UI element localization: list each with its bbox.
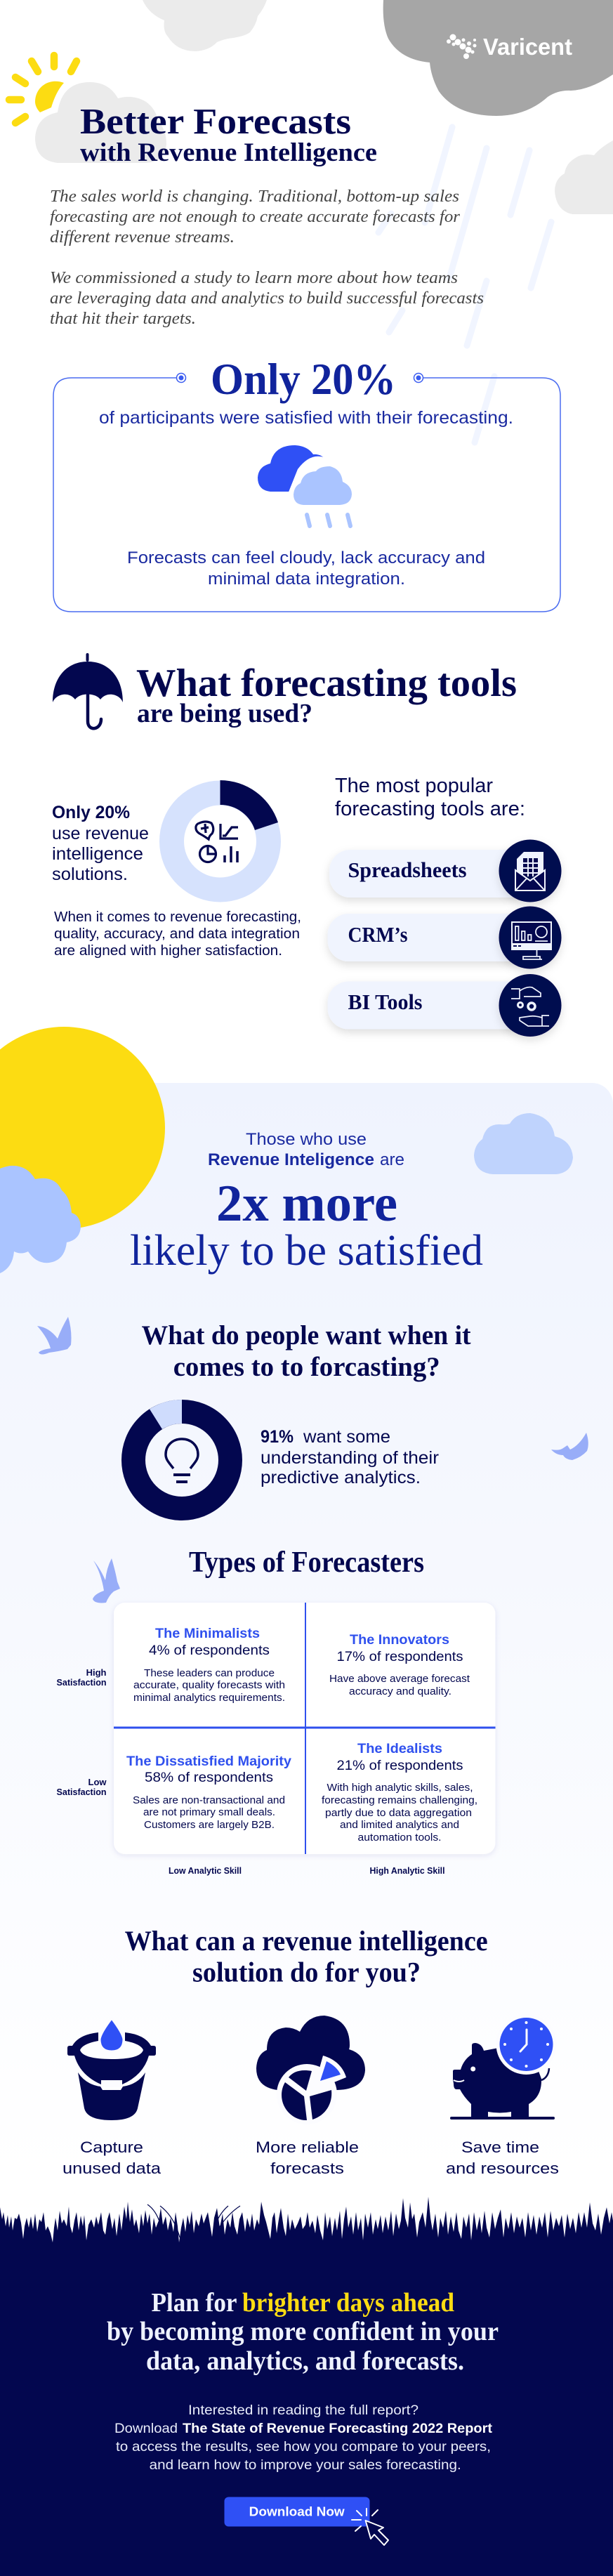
intro text: The sales world is changing. Traditional, bottom-up sales <box>50 188 459 206</box>
axis labels: Satisfaction <box>56 1677 107 1688</box>
quadrant: idealists: 21% of respondents <box>337 1759 463 1773</box>
heading: what can RI do <box>125 1925 488 1987</box>
icon: sun with rays <box>9 55 77 123</box>
text: those who use: Revenue Inteligence <box>208 1150 374 1169</box>
icon: umbrella <box>53 653 123 728</box>
footer: navy panel with grass edge <box>0 2197 613 2576</box>
icon: hands and gears <box>511 987 549 1026</box>
icon: bird right <box>551 1433 588 1460</box>
heading: what forecasting tools: are being used? <box>137 699 312 728</box>
icon: monitor <box>511 921 552 959</box>
panel: only 20 percent: Only 20% <box>211 355 396 404</box>
benefit labels: unused data <box>62 2160 162 2177</box>
text: full report invitation: Interested in reading the full report? <box>188 2403 418 2418</box>
stat: 2x more: 2x more <box>216 1175 397 1233</box>
intro text: different revenue streams. <box>50 228 235 247</box>
benefit labels: Save time <box>461 2138 539 2156</box>
quadrant: dissatisfied majority: Sales are non-transactional and <box>133 1794 285 1806</box>
text: only 20 percent use RI: solutions. <box>52 865 128 884</box>
quadrant: dissatisfied majority: The Dissatisfied Majority <box>126 1754 291 1769</box>
pill: BI tools <box>327 974 562 1037</box>
heading: what can RI do: What can a revenue intelligence <box>125 1925 488 1957</box>
icon: spreadsheet envelope <box>515 852 545 891</box>
icon: bird left <box>37 1317 72 1354</box>
panel: only 20 percent <box>53 355 560 612</box>
benefit labels: More reliable <box>256 2138 359 2156</box>
quadrant: minimalists: minimal analytics requirements. <box>133 1692 285 1704</box>
quadrant: minimalists: accurate, quality forecasts with <box>133 1679 285 1691</box>
axis labels: Satisfaction <box>56 1787 107 1797</box>
background cloud: top centre <box>143 0 267 51</box>
stat: 2x more <box>130 1175 483 1275</box>
heading: types of forecasters: Types of Forecasters <box>189 1546 424 1579</box>
panel: only 20 percent: minimal data integration. <box>208 570 405 589</box>
pill: spreadsheets: Spreadsheets <box>348 857 466 882</box>
button: download now <box>225 2497 369 2527</box>
icon: cloud right <box>474 1113 573 1174</box>
quadrant: minimalists <box>133 1627 285 1704</box>
quadrant: idealists: The Idealists <box>357 1742 442 1756</box>
text: those who use: are <box>380 1150 404 1169</box>
pill: CRMs: CRM’s <box>348 922 407 947</box>
heading: plan for brighter days: data, analytics, and forecasts. <box>146 2346 464 2376</box>
quadrant: innovators: accuracy and quality. <box>349 1685 451 1697</box>
quadrant: idealists: With high analytic skills, sales, <box>327 1782 473 1794</box>
heading: plan for brighter days: Plan for <box>152 2288 237 2318</box>
text: full report invitation <box>114 2403 493 2473</box>
icon: click cursor <box>352 2509 388 2545</box>
text: those who use: Those who use <box>246 1130 367 1149</box>
benefit labels <box>62 2138 559 2177</box>
intro text <box>50 188 484 328</box>
axis labels <box>56 1667 445 1876</box>
text: only 20 percent use RI: intelligence <box>52 844 143 864</box>
button: download now: Download Now <box>249 2504 345 2518</box>
title: Better Forecasts <box>80 102 351 142</box>
quadrant: idealists: partly due to data aggregation <box>325 1807 472 1819</box>
panel: satisfaction background <box>0 1083 613 2235</box>
icon: piggy bank with clock <box>450 2014 556 2120</box>
text: full report invitation: to access the results, see how you compare to your peers, <box>116 2440 491 2455</box>
heading: what can RI do: solution do for you? <box>192 1957 421 1987</box>
axis labels: Low <box>88 1777 107 1787</box>
axis labels: High Analytic Skill <box>369 1865 445 1876</box>
heading: plan for brighter days: by becoming more confident in your <box>107 2317 499 2346</box>
heading: what do people want: What do people want when it <box>142 1320 471 1351</box>
background cloud: logo cloud <box>383 0 613 116</box>
text: only 20 percent use RI: use revenue <box>52 824 149 843</box>
icon: bucket <box>67 2018 156 2120</box>
icon: analytics glyphs <box>196 822 238 862</box>
text: full report invitation: and learn how to improve your sales forecasting. <box>150 2458 461 2473</box>
text: full report invitation: Download <box>114 2421 178 2436</box>
benefit labels: forecasts <box>270 2160 344 2177</box>
stat: 2x more: likely to be satisfied <box>130 1227 483 1275</box>
icon: cloud with pie chart <box>256 2016 365 2124</box>
text: 91 percent: understanding of their <box>261 1448 439 1468</box>
icon: cloud over sun <box>0 1166 81 1273</box>
chart: forecaster matrix <box>114 1603 496 1854</box>
panel: only 20 percent: Forecasts can feel cloudy, lack accuracy and <box>127 548 485 567</box>
quadrant: minimalists: These leaders can produce <box>144 1667 275 1679</box>
benefit labels: Capture <box>80 2138 143 2156</box>
title: with Revenue Intelligence <box>80 138 377 167</box>
logo: Varicent: Varicent <box>483 34 572 60</box>
background cloud: behind title <box>35 82 166 163</box>
chart: 91 percent donut <box>133 1400 230 1509</box>
icon: light bulb <box>166 1439 198 1482</box>
rain streaks <box>378 127 551 442</box>
text: 91 percent <box>261 1427 439 1487</box>
quadrant: idealists: automation tools. <box>358 1832 441 1844</box>
text: satisfaction note <box>54 909 301 959</box>
benefit labels: and resources <box>446 2160 559 2177</box>
text: full report invitation: The State of Revenue Forecasting 2022 Report <box>183 2421 493 2436</box>
axis labels: Low Analytic Skill <box>169 1865 242 1876</box>
intro text: forecasting are not enough to create accurate forecasts for <box>50 208 461 226</box>
heading: most popular tools: forecasting tools are: <box>335 798 525 820</box>
quadrant: dissatisfied majority <box>126 1754 291 1831</box>
intro text: that hit their targets. <box>50 310 196 328</box>
heading: what forecasting tools <box>136 662 517 728</box>
text: satisfaction note: quality, accuracy, and data integration <box>54 926 300 942</box>
quadrant: idealists: and limited analytics and <box>340 1819 459 1831</box>
title <box>80 102 377 167</box>
heading: what do people want: comes to to forcasting? <box>173 1352 440 1382</box>
quadrant: minimalists: The Minimalists <box>155 1627 260 1641</box>
heading: plan for brighter days <box>107 2288 499 2376</box>
text: satisfaction note: are aligned with higher satisfaction. <box>54 943 282 959</box>
quadrant: innovators: 17% of respondents <box>337 1650 463 1664</box>
icon: bird above matrix <box>93 1558 120 1603</box>
chart: 20 percent donut <box>171 780 278 890</box>
text: 91 percent: 91% <box>261 1427 294 1447</box>
text: only 20 percent use RI <box>52 803 149 884</box>
text: 91 percent: want some <box>303 1427 390 1447</box>
quadrant: innovators <box>329 1633 470 1697</box>
text: 91 percent: predictive analytics. <box>261 1468 421 1487</box>
text: those who use <box>208 1130 404 1169</box>
background cloud: right <box>555 140 613 214</box>
pill: spreadsheets <box>329 840 562 902</box>
pill: CRMs <box>327 906 562 969</box>
quadrant: innovators: The Innovators <box>350 1633 449 1648</box>
quadrant: idealists <box>322 1742 477 1844</box>
icon: rain clouds <box>258 445 358 526</box>
intro text: We commissioned a study to learn more about how teams <box>50 269 458 287</box>
intro text: are leveraging data and analytics to build successful forecasts <box>50 289 484 308</box>
quadrant: innovators: Have above average forecast <box>329 1673 470 1685</box>
heading: plan for brighter days: brighter days ahead <box>242 2288 454 2318</box>
quadrant: idealists: forecasting remains challenging, <box>322 1794 477 1806</box>
heading: most popular tools <box>335 775 525 820</box>
heading: what forecasting tools: What forecasting tools <box>136 662 517 705</box>
heading: what do people want <box>142 1320 471 1382</box>
quadrant: dissatisfied majority: are not primary small deals. <box>143 1806 275 1818</box>
heading: most popular tools: The most popular <box>335 775 493 797</box>
decorative: big sun <box>0 1027 165 1229</box>
axis labels: High <box>86 1667 107 1678</box>
quadrant: dissatisfied majority: Customers are largely B2B. <box>144 1819 275 1831</box>
pill: BI tools: BI Tools <box>348 990 423 1014</box>
panel: only 20 percent: of participants were satisfied with their forecasting. <box>99 408 513 428</box>
text: only 20 percent use RI: Only 20% <box>52 803 130 822</box>
quadrant: minimalists: 4% of respondents <box>149 1643 270 1658</box>
quadrant: dissatisfied majority: 58% of respondents <box>145 1770 273 1785</box>
text: satisfaction note: When it comes to revenue forecasting, <box>54 909 301 925</box>
